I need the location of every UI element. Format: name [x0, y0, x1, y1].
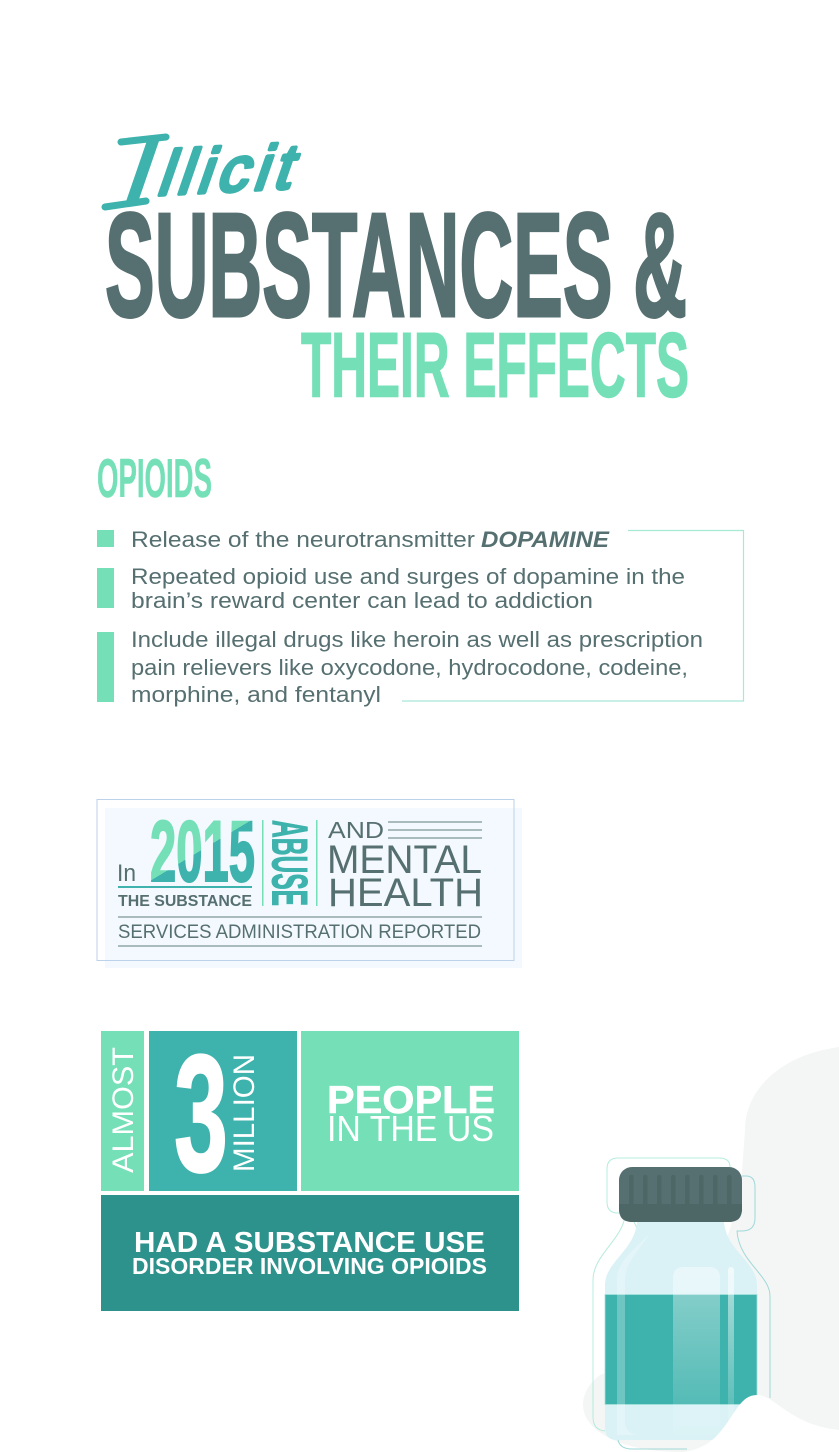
text: The Substance: THE SUBSTANCE [118, 893, 252, 910]
block: 3 million [149, 1021, 297, 1207]
panel: 2015 SAMHSA statement [97, 800, 522, 968]
block: had a substance use disorder: DISORDER INVOLVING OPIOIDS [132, 1253, 487, 1279]
title: Illicit Substances and Their Effects [105, 112, 689, 416]
block: people in the US: PEOPLE [327, 1079, 495, 1122]
bottle body [605, 1222, 757, 1440]
bullet 1 [97, 527, 610, 552]
bullet 2: brain’s reward center can lead to addiction [131, 588, 593, 613]
white wave foreground [683, 1395, 839, 1452]
label band [605, 1294, 757, 1404]
bullet 1: Release of the neurotransmitter [131, 527, 475, 552]
bullet 3: Include illegal drugs like heroin as well as prescription [131, 627, 703, 652]
title script word: Illicit: llicit [151, 131, 314, 209]
block: people in the US [301, 1031, 519, 1191]
text: Health: HEALTH [328, 871, 483, 915]
panel: 2015 SAMHSA statement: ABUSE [262, 820, 318, 906]
bullet 2 [97, 564, 685, 613]
block: had a substance use disorder [101, 1195, 519, 1311]
text: And: AND [328, 817, 384, 843]
text: Mental: MENTAL [327, 838, 482, 882]
icon: medicine bottle [593, 1158, 770, 1449]
block: had a substance use disorder: HAD A SUBSTANCE USE [134, 1227, 485, 1259]
bullet 3: pain relievers like oxycodone, hydrocodone, codeine, [131, 655, 688, 680]
bottle outline offset [593, 1158, 770, 1449]
block: 3 million: 3 [174, 1021, 228, 1207]
bullet 1: DOPAMINE [481, 527, 610, 552]
cap [619, 1167, 742, 1222]
block: almost: ALMOST [107, 1047, 140, 1173]
bullet 2: Repeated opioid use and surges of dopamine in the [131, 564, 685, 589]
background blob [583, 1047, 839, 1452]
big year 2015: 2015 [150, 804, 255, 900]
block: people in the US: IN THE US [327, 1108, 494, 1149]
block: 3 million: MILLION [228, 1054, 261, 1172]
title script word: Illicit: I [112, 119, 179, 224]
text: Services Administration Reported: SERVICES ADMINISTRATION REPORTED [118, 922, 481, 943]
title script word: Illicit [105, 112, 321, 224]
heading: Opioids: OPIOIDS [97, 447, 212, 509]
glass highlights [617, 1233, 734, 1435]
panel: opioid facts [97, 527, 744, 707]
text: In: In [117, 860, 136, 887]
panel: almost 3 million people statistic [101, 1021, 519, 1311]
bullet 3: morphine, and fentanyl [131, 682, 381, 707]
bullet 3 [97, 627, 703, 707]
block: almost [101, 1031, 144, 1191]
